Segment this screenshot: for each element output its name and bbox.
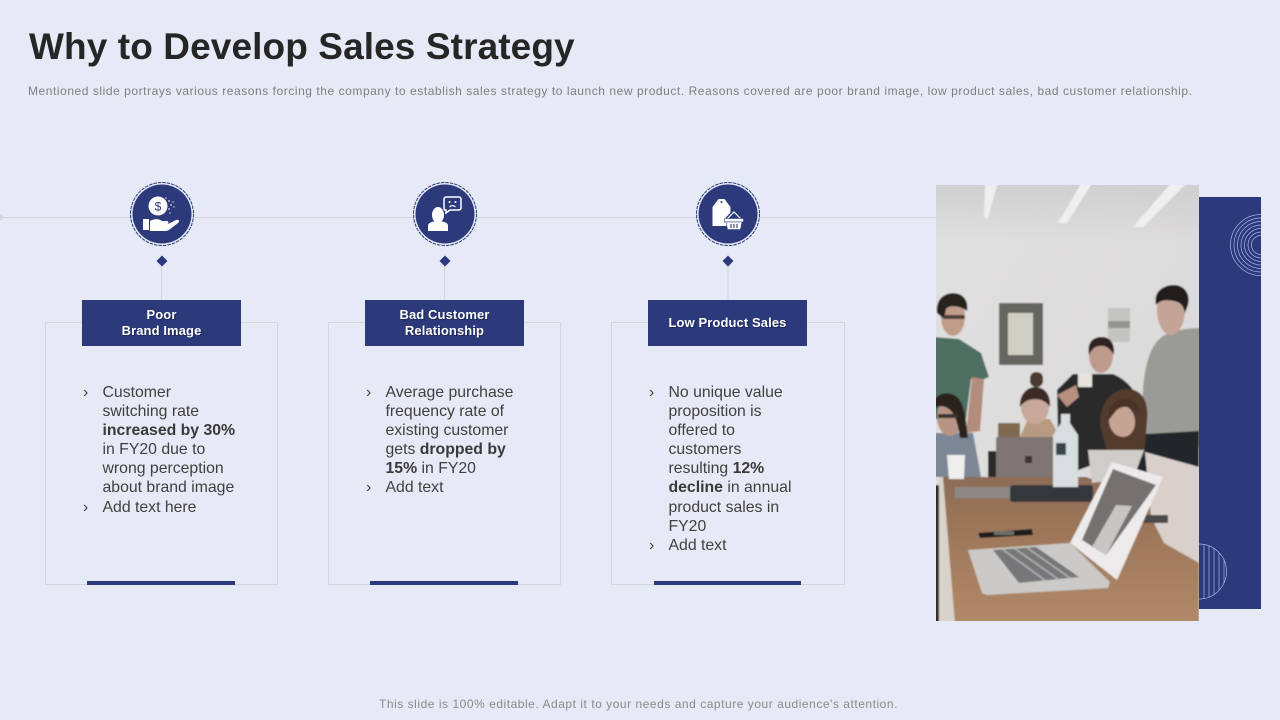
picture frame (999, 303, 1043, 365)
heading: Bad Customer (399, 307, 490, 322)
bullet text: existing customer (386, 422, 508, 439)
bullet text: Customer (102, 384, 171, 401)
front laptop base (968, 543, 1110, 595)
footer note: This slide is 100% editable. Adapt it to your needs and capture your audience's attention. (379, 697, 898, 711)
bullet text: frequency rate of (386, 403, 504, 420)
dark stand (1140, 515, 1168, 523)
bullet text: switching rate (102, 403, 199, 420)
card outline (611, 322, 845, 585)
bullet text (366, 384, 513, 496)
woman left seated (933, 433, 981, 477)
photo: team meeting around a table (936, 185, 1199, 621)
bullet text: resulting 12% (668, 460, 764, 477)
bullet text: 15% in FY20 (386, 460, 476, 477)
bullet text: proposition is (668, 403, 762, 420)
card accent bar (654, 581, 801, 585)
bullet text: in FY20 due to (102, 441, 205, 458)
heading: Low Product Sales (668, 315, 786, 330)
bullet text: Add text here (102, 499, 196, 516)
right laptop lid (1145, 452, 1199, 563)
heading (82, 300, 241, 346)
front laptop screen (1070, 462, 1163, 580)
bullet text (650, 384, 791, 554)
diamond marker (156, 256, 168, 266)
phone (978, 529, 1033, 538)
card outline (45, 322, 278, 585)
mug (947, 455, 965, 479)
panel: bad customer relationship (328, 182, 561, 585)
bullet text: wrong perception (102, 460, 224, 477)
card accent bar (87, 581, 235, 585)
timeline connector (0, 214, 936, 300)
icon: hand holding dollar coin (130, 182, 194, 246)
diamond marker (722, 256, 734, 266)
heading: Relationship (405, 323, 484, 338)
panel: low product sales (611, 182, 845, 585)
bullet text: about brand image (102, 479, 234, 496)
woman centre (1030, 372, 1043, 387)
heading (648, 300, 807, 346)
man right (1142, 328, 1202, 448)
bullet text: customers (668, 441, 741, 458)
bullet text: Add text (668, 537, 726, 554)
wall lamp (1108, 308, 1130, 342)
title: Why to Develop Sales Strategy (29, 26, 575, 67)
photo frame behind laptop (998, 423, 1020, 437)
heading: Brand Image (122, 323, 201, 338)
man left (933, 337, 989, 419)
objects on table (955, 487, 1010, 498)
heading (365, 300, 524, 346)
woman back (1056, 373, 1134, 471)
bullet text: FY20 (668, 518, 706, 535)
bullet text: Average purchase (386, 384, 513, 401)
icon: price tag and basket (696, 182, 760, 246)
woman right seated (1136, 430, 1199, 473)
bullet text: Add text (386, 479, 443, 496)
heading: Poor (146, 307, 176, 322)
bullet text: product sales in (668, 499, 779, 516)
bullet text: No unique value (668, 384, 783, 401)
panel: poor brand image (45, 182, 278, 585)
diamond marker (440, 256, 450, 266)
back laptop (996, 437, 1054, 480)
subtitle: Mentioned slide portrays various reasons forcing the company to establish sales strategy to launch new product. Reasons covered are poor brand image, low product sales, bad customer relationship. (28, 84, 1192, 98)
icon: customer with unhappy speech bubble (413, 182, 477, 246)
bullet text: gets dropped by (386, 441, 506, 458)
papers and cup (1088, 450, 1144, 483)
table (940, 477, 1199, 624)
bullet text: decline in annual (668, 479, 791, 496)
bullet text: increased by 30% (102, 422, 235, 439)
bullet text: offered to (668, 422, 735, 439)
card accent bar (370, 581, 518, 585)
bullet text (84, 384, 235, 516)
card outline (328, 322, 561, 585)
icon: hand holding dollar coin: $ (155, 200, 162, 214)
water bottle (1053, 414, 1078, 487)
blue backing panel (1199, 197, 1261, 609)
